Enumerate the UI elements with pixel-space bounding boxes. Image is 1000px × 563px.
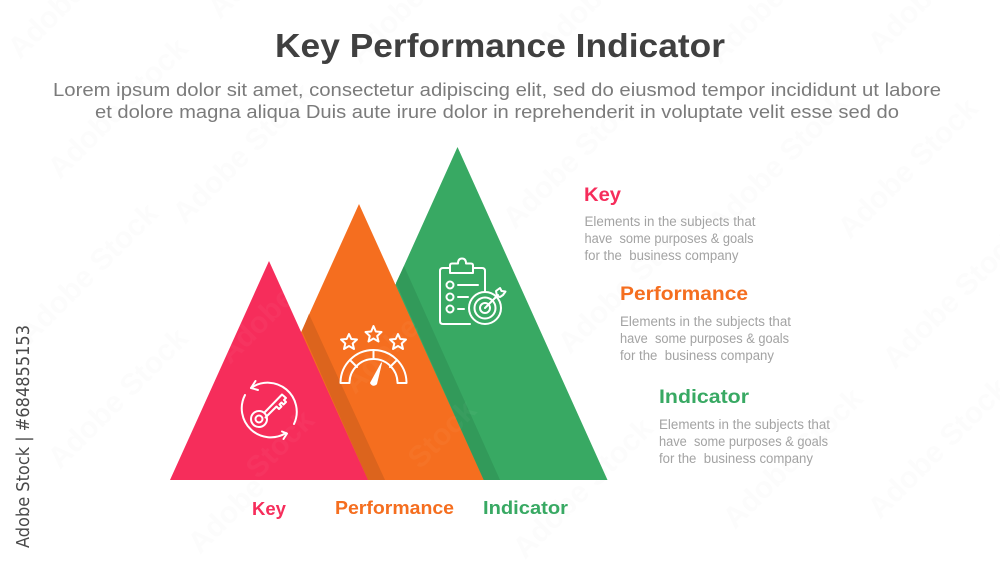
text block: performance: Performance xyxy=(620,284,748,305)
intro paragraph: et dolore magna aliqua Duis aute irure dolor in reprehenderit in voluptate velit esse sed do xyxy=(95,102,899,122)
side credit: Adobe Stock | #684855153 xyxy=(14,325,34,548)
text: Adobe Stock xyxy=(182,407,335,560)
text block: key: Key xyxy=(584,185,621,206)
icon: gauge with stars xyxy=(340,326,406,385)
text block: key xyxy=(584,185,756,263)
green triangle: indicator xyxy=(308,147,608,480)
orange triangle shadow xyxy=(302,314,385,480)
text: Adobe Stock xyxy=(702,87,855,240)
text: Adobe Stock xyxy=(552,207,705,360)
bottom label: indicator: Indicator xyxy=(483,498,568,518)
triangle chart: Adobe xyxy=(212,281,301,370)
triangle chart xyxy=(170,147,608,485)
text block: key: Elements in the subjects that xyxy=(584,214,756,229)
title: Key Performance Indicator xyxy=(275,27,725,64)
intro paragraph xyxy=(53,80,941,122)
text block: performance xyxy=(620,284,791,363)
triangle chart: Stock xyxy=(240,404,321,485)
text block: indicator: have some purposes & goals xyxy=(659,434,828,449)
text block: indicator: for the business company xyxy=(659,451,813,466)
text: Adobe Stock xyxy=(507,412,660,563)
text block: indicator xyxy=(659,387,830,466)
icon: key with circular arrows xyxy=(242,381,297,439)
text: Adobe Stock xyxy=(497,82,650,235)
text block: performance: for the business company xyxy=(620,348,774,363)
icon: clipboard checklist with target xyxy=(440,258,506,324)
text block: performance: have some purposes & goals xyxy=(620,331,789,346)
triangle chart: Stock xyxy=(402,394,483,475)
intro paragraph: Lorem ipsum dolor sit amet, consectetur adipiscing elit, sed do eiusmod tempor incididunt ut labore xyxy=(53,80,941,100)
text block: performance: Elements in the subjects that xyxy=(620,314,791,329)
text: Adobe Stock xyxy=(42,32,195,185)
text: Adobe Stock xyxy=(167,77,320,230)
text block: indicator: Elements in the subjects that xyxy=(659,417,830,432)
green triangle shadow xyxy=(396,266,500,480)
text block: indicator: Indicator xyxy=(659,387,750,408)
pink triangle: key xyxy=(170,261,368,480)
bottom label: performance: Performance xyxy=(335,498,454,518)
text: Adobe Stock xyxy=(12,197,165,350)
orange triangle: performance xyxy=(234,204,484,480)
text block: key: have some purposes & goals xyxy=(584,231,754,246)
text: Adobe Stock xyxy=(717,382,870,535)
text block: key: for the business company xyxy=(584,248,739,263)
text: Adobe Stock xyxy=(42,322,195,475)
bottom label: key: Key xyxy=(252,499,286,519)
triangle chart: Adobe xyxy=(337,311,426,400)
text: Adobe Stock xyxy=(832,92,985,245)
